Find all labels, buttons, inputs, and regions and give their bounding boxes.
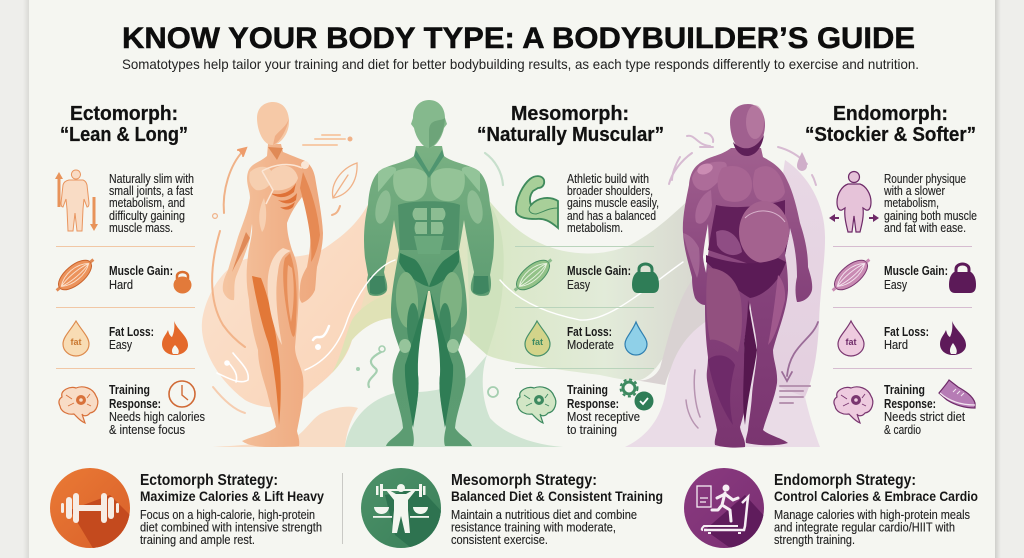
muscle gain label: Muscle Gain:	[109, 264, 173, 278]
strategy text: Maintain a nutritious diet and combine	[451, 508, 637, 522]
strategy: mesomorph	[361, 468, 663, 555]
fat loss label	[109, 325, 154, 352]
icon: clock	[169, 381, 195, 407]
endomorph body silhouette	[683, 148, 812, 448]
icon: water drop	[625, 322, 647, 355]
icon: fat drop: fat	[70, 337, 82, 347]
strategy text: Ectomorph Strategy:	[140, 472, 278, 489]
figure: mesomorph	[364, 100, 494, 446]
strategy text: Maximize Calories & Lift Heavy	[140, 489, 324, 504]
figure: endomorph	[683, 104, 812, 448]
heading: “Lean & Long”	[60, 124, 188, 146]
training response label: to training	[567, 423, 617, 437]
training response label: Needs high calories	[109, 410, 205, 424]
peach blob	[202, 197, 375, 407]
fat loss label: Easy	[109, 338, 133, 352]
muscle gain label	[884, 264, 948, 292]
description: gaining both muscle	[884, 209, 977, 223]
heading	[477, 103, 664, 146]
heading	[60, 103, 188, 146]
description: metabolism.	[567, 221, 623, 235]
icon: lean figure	[55, 170, 98, 231]
icon: kettlebell	[174, 272, 192, 294]
heading: Ectomorph:	[70, 103, 178, 125]
muscle gain label: Hard	[109, 278, 133, 292]
muscle gain label: Muscle Gain:	[567, 264, 631, 278]
description: and has a balanced	[567, 209, 656, 223]
heading: Endomorph:	[833, 103, 948, 125]
ectomorph muscle shading	[232, 147, 320, 425]
description: muscle mass.	[109, 221, 173, 235]
icon: fat drop: fat	[846, 337, 857, 347]
training response label: Needs strict diet	[884, 410, 965, 424]
description	[883, 172, 977, 235]
description: Rounder physique	[884, 172, 966, 186]
decorations: mesomorph side	[356, 153, 683, 397]
icon: brain	[59, 387, 98, 423]
beige band	[332, 293, 395, 373]
strategy text: Control Calories & Embrace Cardio	[774, 489, 978, 504]
description: Naturally slim with	[109, 172, 194, 186]
heading	[805, 103, 976, 146]
icon: brain	[517, 387, 556, 423]
purple disc	[760, 160, 825, 397]
fat loss label: Moderate	[567, 338, 614, 352]
fat loss label: Fat Loss:	[109, 325, 154, 339]
title: KNOW YOUR BODY TYPE: A BODYBUILDER’S GUIDE	[122, 22, 915, 55]
description: small joints, a fast	[109, 184, 193, 198]
panel: mesomorph column	[477, 103, 664, 437]
fat loss label: Fat Loss:	[567, 325, 612, 339]
figure: ectomorph	[223, 102, 323, 447]
strategy text: Endomorph Strategy:	[774, 472, 916, 489]
description: with a slower	[883, 184, 945, 198]
description: gains muscle easily,	[567, 196, 659, 210]
description: and fat with ease.	[884, 221, 966, 235]
bottom green	[345, 355, 563, 447]
strategy text	[451, 472, 663, 547]
icon: fat drop	[525, 321, 550, 356]
decorations: ectomorph side	[212, 135, 395, 413]
icon: flexed arm	[516, 176, 558, 228]
heading: Mesomorph:	[511, 103, 629, 125]
strategy text: and integrate regular cardio/HIIT with	[774, 520, 955, 534]
mesomorph head	[411, 100, 447, 148]
icon: lifter badge	[361, 468, 441, 548]
description: metabolism, and	[109, 196, 185, 210]
mesomorph body silhouette	[364, 146, 494, 446]
icon: treadmill badge	[684, 468, 764, 548]
ground peach	[213, 407, 358, 447]
strategy text	[140, 472, 324, 547]
description	[109, 172, 194, 235]
description: difficulty gaining	[109, 209, 185, 223]
mesomorph muscle detail	[370, 150, 489, 428]
subtitle: Somatotypes help tailor your training and diet for better bodybuilding results, as each type responds differently to exercise and nutrition.	[122, 56, 919, 72]
pale green wedge	[466, 195, 504, 355]
muscle gain label	[109, 264, 173, 292]
muscle gain label: Easy	[567, 278, 591, 292]
fat loss label: Fat Loss:	[884, 325, 929, 339]
strategy text	[774, 472, 978, 547]
grey purple band	[635, 280, 712, 385]
strategy text: training and ample rest.	[140, 533, 255, 547]
icon: running shoe	[939, 380, 975, 408]
strategy: endomorph	[684, 468, 978, 555]
strategy text: Mesomorph Strategy:	[451, 472, 597, 489]
heading: “Stockier & Softer”	[805, 124, 976, 146]
description: Athletic build with	[567, 172, 649, 186]
panel: endomorph column	[805, 103, 977, 437]
icon: kettlebell	[632, 264, 659, 293]
training response label: Response:	[567, 397, 619, 411]
training response label	[567, 383, 640, 437]
strategy text: consistent exercise.	[451, 533, 548, 547]
green and beige band	[322, 183, 692, 381]
muscle gain label	[567, 264, 631, 292]
endomorph head	[730, 104, 765, 152]
strategy text: Focus on a high-calorie, high-protein	[140, 508, 315, 522]
muscle gain label: Muscle Gain:	[884, 264, 948, 278]
strategy text: Balanced Diet & Consistent Training	[451, 489, 663, 504]
fat loss label	[884, 325, 929, 352]
description: broader shoulders,	[567, 184, 653, 198]
fat loss label: Hard	[884, 338, 908, 352]
icon: fat drop: fat	[532, 337, 543, 347]
training response label: & intense focus	[109, 423, 185, 437]
icon: kettlebell	[949, 264, 976, 293]
description: metabolism,	[884, 196, 939, 210]
training response label: Response:	[884, 397, 936, 411]
icon: muscle	[51, 252, 99, 298]
endomorph muscle detail	[683, 162, 790, 425]
training response label	[884, 383, 965, 437]
pale purple field	[625, 300, 820, 447]
training response label: Training	[109, 383, 150, 397]
training response label: Most receptive	[567, 410, 640, 424]
strategy text: resistance training with moderate,	[451, 520, 616, 534]
icon: brain	[834, 387, 873, 423]
icon: fat drop	[63, 321, 89, 356]
panel: ectomorph column	[51, 103, 205, 437]
ectomorph head	[257, 102, 289, 145]
training response label: & cardio	[884, 423, 921, 437]
icon: fat drop	[838, 321, 864, 356]
icon: gear and check	[620, 380, 654, 410]
icon: muscle	[827, 252, 875, 298]
ectomorph body silhouette	[223, 144, 323, 447]
icon: muscle	[509, 252, 557, 298]
decorations: endomorph side	[669, 133, 818, 428]
training response label: Response:	[109, 397, 161, 411]
strategy text: Manage calories with high-protein meals	[774, 508, 970, 522]
heading: “Naturally Muscular”	[477, 124, 664, 146]
training response label: Training	[884, 383, 925, 397]
muscle gain label: Easy	[884, 278, 908, 292]
training response label	[109, 383, 205, 437]
icon: flame	[940, 321, 966, 355]
training response label: Training	[567, 383, 608, 397]
background wave shapes	[202, 160, 825, 447]
strategy text: strength training.	[774, 533, 855, 547]
fat loss label	[567, 325, 614, 352]
strategy text: diet combined with intensive strength	[140, 520, 322, 534]
description	[567, 172, 659, 235]
strategy: ectomorph	[50, 468, 324, 548]
icon: dumbbell badge	[50, 468, 130, 548]
icon: round figure	[829, 172, 879, 232]
icon: flame	[162, 321, 188, 355]
